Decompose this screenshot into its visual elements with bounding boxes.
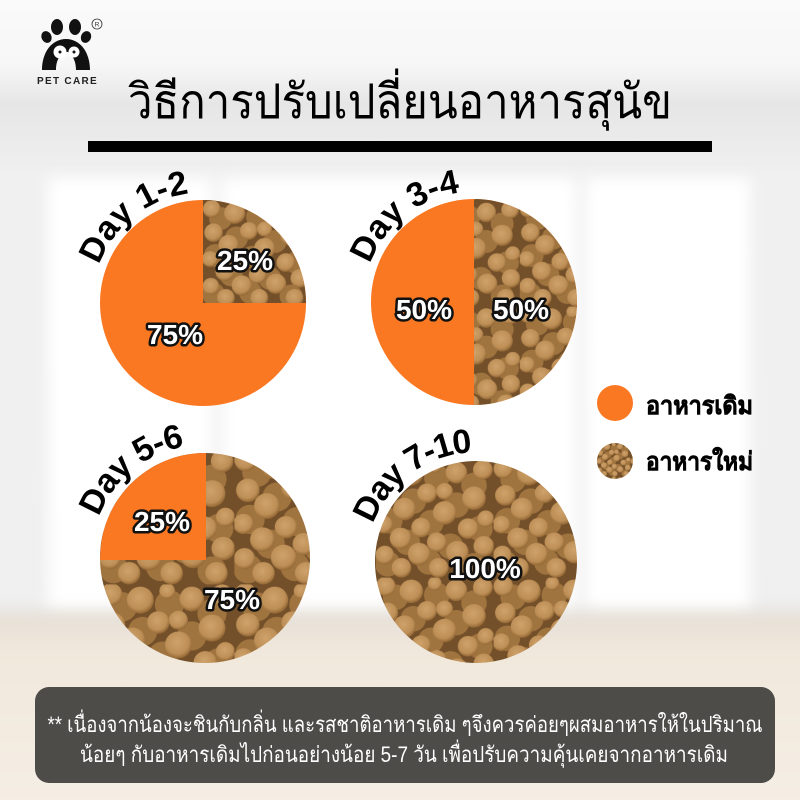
kibble slice 75% (100, 453, 310, 663)
label 100%: 100% (449, 553, 521, 584)
icon: orange old food (597, 385, 633, 421)
label 75%: 75% (204, 584, 260, 615)
legend (597, 385, 753, 479)
legend label: new food: อาหารใหม่ (646, 446, 753, 476)
label 50% orange: 50% (396, 294, 452, 325)
orange slice 50% (371, 199, 577, 405)
panel: day 7-10 pie chart (352, 430, 577, 663)
label 50% kibble: 50% (493, 294, 549, 325)
title: วิธีการปรับเปลี่ยนอาหารสุนัข (128, 68, 672, 131)
registered mark: R (95, 22, 100, 28)
heading: day 3-4: Day 3-4 (350, 170, 459, 262)
label 75%: 75% (147, 319, 203, 350)
icon: paw with pets (39, 19, 93, 70)
label 25%: 25% (217, 245, 273, 276)
title underline (88, 141, 712, 152)
logo: pet care (37, 19, 102, 87)
heading: day 1-2: Day 1-2 (78, 172, 188, 263)
panel: day 3-4 pie chart (350, 170, 577, 405)
kibble slice 50% (474, 199, 577, 405)
legend label: old food: อาหารเดิม (646, 392, 753, 420)
kibble slice 25% (203, 200, 306, 303)
icon: kibble new food (597, 443, 633, 479)
kibble circle 100% (375, 461, 577, 663)
orange slice 75% (100, 200, 306, 406)
callout: note panel (35, 687, 775, 783)
panel: day 5-6 pie chart (78, 425, 310, 663)
label 25%: 25% (134, 506, 190, 537)
heading: day 7-10: Day 7-10 (352, 430, 470, 522)
orange slice 25% (100, 453, 206, 560)
logo wordmark: PET CARE (37, 76, 98, 87)
panel: day 1-2 pie chart (78, 172, 306, 406)
heading: day 5-6: Day 5-6 (78, 425, 182, 515)
